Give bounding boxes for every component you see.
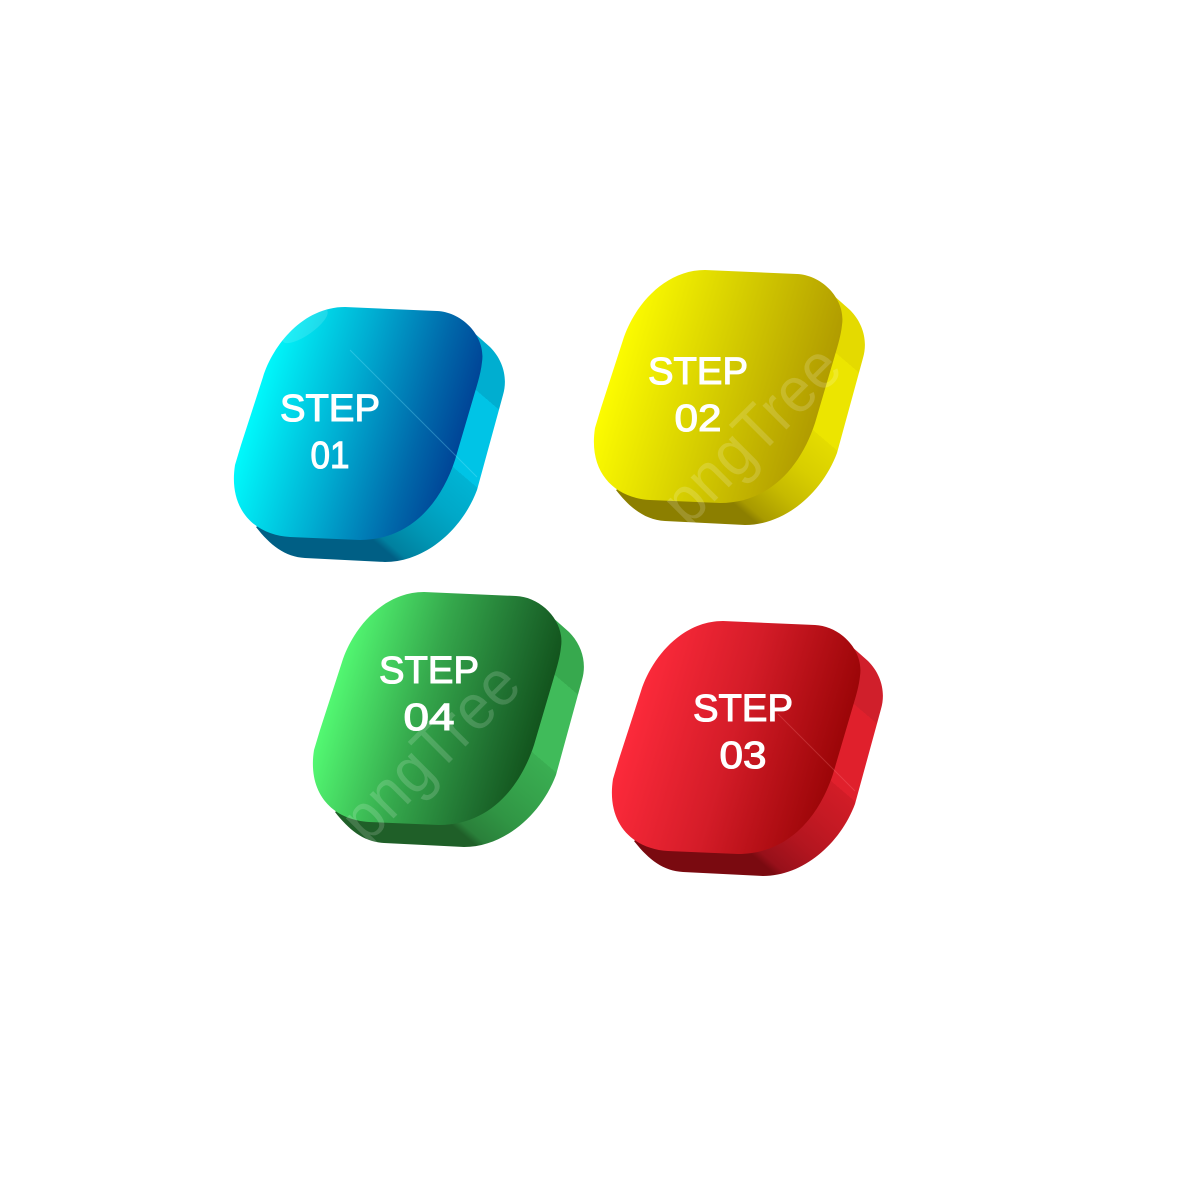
block side: red: [634, 630, 883, 876]
watermark: green block: pngTree: [326, 647, 534, 855]
number: 02: 02: [674, 398, 722, 440]
watermark: yellow block: pngTree: [647, 330, 855, 538]
block side: yellow: [616, 279, 865, 525]
block side: blue: [256, 316, 505, 562]
number: 01: 01: [310, 435, 350, 477]
highlight streak: red: [778, 714, 855, 791]
panel: step 02 yellow block: [594, 270, 865, 538]
panel: step 01 blue block: [234, 303, 505, 562]
label: step 01: STEP: [280, 388, 380, 430]
number: 04: 04: [404, 697, 454, 739]
block top face: green: [313, 592, 561, 825]
block top face: yellow: [594, 270, 842, 503]
number: 03: 03: [720, 735, 766, 777]
label: step 03: STEP: [693, 688, 793, 730]
label: step 04: STEP: [379, 650, 479, 692]
watermark swirl: blue block: [278, 303, 332, 349]
panel: step 03 red block: [612, 621, 883, 876]
highlight streak: blue: [350, 350, 477, 477]
block side: green: [335, 601, 584, 847]
label: step 02: STEP: [648, 351, 748, 393]
block top face: red: [612, 621, 860, 854]
panel: step 04 green block: [313, 592, 584, 855]
block top face: blue: [234, 307, 482, 540]
